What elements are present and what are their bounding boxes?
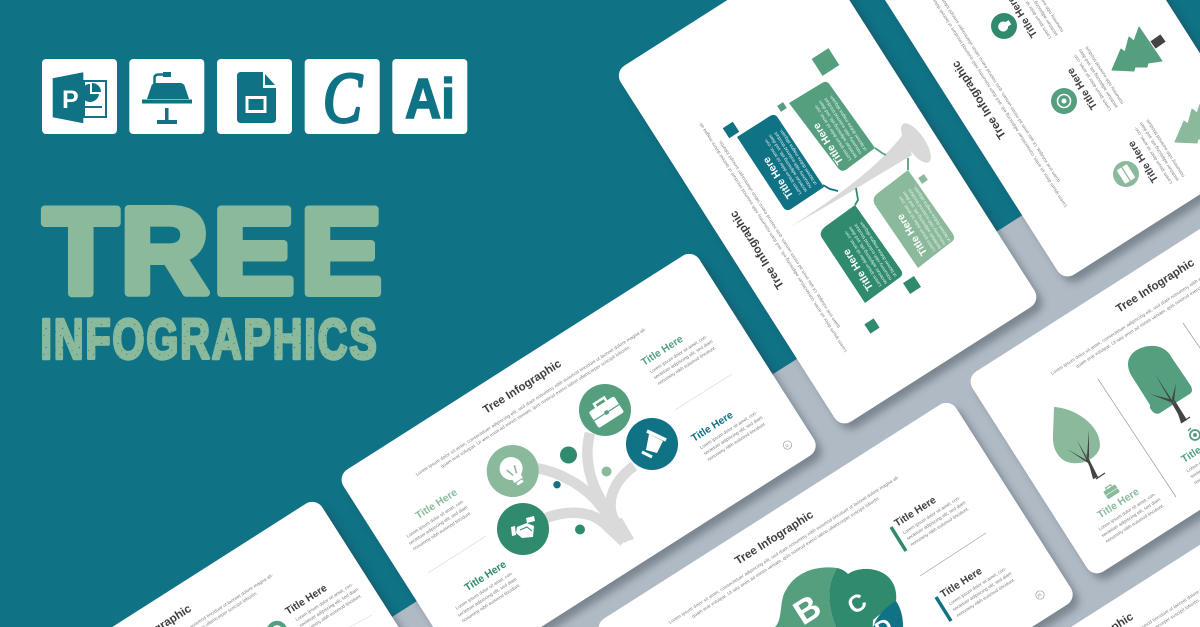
panel: slide with circle tree — [337, 249, 826, 627]
icon: pine tree green — [1112, 27, 1163, 71]
text block: left bottom: nonummy nibh euismod tincidunt. — [461, 582, 521, 623]
intro text: Lorem ipsum dolor sit amet, consectetuer adipiscing elit, sed diam nonummy nibh euismod tincidunt ut laoreet dolore magna ali- — [415, 326, 647, 477]
icon: PowerPoint: P — [62, 86, 79, 114]
page number — [783, 441, 792, 449]
text block: Title Here — [284, 583, 330, 618]
box: sage: sectetuer adipiscing elit, sed diam — [901, 190, 942, 250]
heading: INFOGRAPHICS: INFOGRAPHICS — [41, 307, 377, 371]
icon: Keynote — [129, 59, 204, 134]
background: grey band — [370, 102, 1200, 627]
icon: arch tree — [1128, 346, 1192, 423]
panel: slide with pine trees — [837, 0, 1200, 287]
heading: TREE: TREE — [44, 183, 382, 319]
text block: right bottom: nonummy nibh euismod tincidunt. — [706, 421, 767, 462]
text block: right top: sectetuer adipiscing elit, sed diam — [653, 339, 714, 380]
box: dark green: Title Here — [841, 246, 876, 292]
box: dark green: ut laoreet dolore magna aliquam. — [858, 220, 898, 278]
box: dark green: nonummy nibh euismod tincidunt — [853, 222, 893, 281]
panel: slide with letter cloud — [594, 398, 1083, 627]
text block: first: nonummy nibh euismod tincidunt. — [909, 506, 970, 547]
text block: left bottom — [445, 558, 522, 624]
text block: third: nonummy nibh euismod tincidunt. — [1144, 118, 1185, 178]
icon: Google Slides — [217, 59, 292, 134]
text block: left top — [396, 486, 473, 552]
text block: right bottom — [690, 397, 767, 463]
icon: Canva: C — [323, 58, 363, 138]
text block: second: sectetuer adipiscing elit, sed diam — [1077, 48, 1119, 109]
icon: Illustrator: Ai — [405, 67, 455, 131]
intro text: Lorem ipsum dolor sit amet, consectetuer adipiscing elit, sed diam nonummy nibh euismod tincidunt ut laoreet dolore magna ali- — [697, 121, 848, 353]
text block: left bottom: Lorem ipsum dolor sit amet, con- — [455, 570, 514, 611]
box: dark green — [821, 205, 902, 303]
text block: second: Lorem ipsum dolor sit amet, con- — [1072, 52, 1112, 112]
box: sage — [874, 170, 954, 268]
page number: 11 — [784, 443, 790, 448]
chart: tree branches — [536, 433, 634, 542]
panel: slide bottom right — [914, 500, 1200, 627]
icon: pine tree sage — [1175, 99, 1200, 143]
heading: Tree Infographic — [949, 58, 1009, 141]
icon: briefcase — [1102, 483, 1120, 499]
heading: Tree Infographic — [733, 508, 816, 568]
text block: arch tree — [1178, 420, 1200, 485]
text block: second: Title Here — [939, 566, 985, 601]
text block: left top: nonummy nibh euismod tincidunt. — [412, 510, 472, 551]
chart: letter cloud: C — [843, 588, 872, 620]
panel: slide bottom left — [0, 497, 449, 627]
text block: right bottom: Lorem ipsum dolor sit amet, con- — [699, 410, 758, 450]
intro text — [988, 576, 1200, 627]
text block: left top: Title Here — [414, 487, 460, 522]
text block: third — [1121, 117, 1186, 193]
page number: 25 — [1037, 593, 1042, 598]
box: teal: Lorem ipsum dolor sit amet, con- — [763, 137, 802, 196]
box: sage: Title Here — [895, 211, 930, 257]
box: teal: ut laoreet dolore magna aliquam. — [778, 128, 818, 186]
icon: leaf tree — [1053, 407, 1105, 479]
text block: first — [1000, 0, 1065, 48]
chart: letter cloud — [775, 567, 903, 627]
box: mid green: nonummy nibh euismod tincidunt — [823, 96, 863, 155]
box: sage: ut laoreet dolore magna aliquam. — [912, 185, 952, 243]
text block: first: Lorem ipsum dolor sit amet, con- — [902, 495, 961, 535]
text block: right top — [640, 321, 717, 387]
page number — [1036, 591, 1044, 599]
text block: first: Title Here — [893, 495, 939, 530]
icon: target — [1051, 88, 1077, 114]
chart: nail trunk — [790, 119, 936, 227]
text block: left top: Lorem ipsum dolor sit amet, con- — [406, 498, 465, 539]
box: sage: nonummy nibh euismod tincidunt — [907, 187, 947, 246]
text block: right bottom: sectetuer adipiscing elit, sed diam — [703, 415, 764, 456]
text block: second: nonummy nibh euismod tincidunt. — [1083, 45, 1124, 105]
connector tails — [823, 148, 908, 205]
text block — [284, 569, 363, 627]
box: dark green: sectetuer adipiscing elit, sed diam — [847, 225, 888, 285]
text block: leaf tree: nonummy nibh euismod tincidunt. — [1104, 503, 1165, 544]
text block: leaf tree: sectetuer adipiscing elit, sed diam — [1100, 497, 1161, 538]
node: handshake — [497, 503, 549, 555]
text block: right top: Lorem ipsum dolor sit amet, con- — [649, 334, 708, 374]
text block: second — [1060, 44, 1125, 120]
icon row: software logos — [42, 58, 467, 138]
intro text — [1050, 225, 1200, 376]
text block: leaf tree: Lorem ipsum dolor sit amet, con- — [1098, 491, 1157, 532]
text block: leaf tree — [1089, 479, 1165, 544]
text block: third: Lorem ipsum dolor sit amet, con- — [1133, 125, 1173, 185]
icon: Canva — [305, 58, 380, 138]
text block: third: sectetuer adipiscing elit, sed diam — [1138, 121, 1180, 182]
icon: stacked case — [1113, 161, 1139, 187]
icon: location ring — [269, 623, 285, 627]
heading: Tree Infographic — [1114, 256, 1197, 316]
dots — [553, 446, 612, 534]
text block: left bottom: sectetuer adipiscing elit, sed diam — [457, 576, 518, 618]
text block: leaf tree: Title Here — [1096, 486, 1142, 521]
box: mid green: sectetuer adipiscing elit, sed diam — [817, 99, 858, 159]
text block: right bottom: Title Here — [690, 410, 736, 445]
box: teal — [737, 115, 824, 210]
box: mid green: Title Here — [811, 120, 846, 166]
icon: stopwatch — [1188, 428, 1200, 440]
box: mid green: ut laoreet dolore magna aliquam. — [828, 94, 868, 152]
node: megaphone — [626, 418, 678, 470]
text block: first — [891, 482, 970, 551]
box: sage: Lorem ipsum dolor sit amet, con- — [897, 194, 936, 253]
text block: second: Title Here — [1065, 65, 1100, 111]
intro text: Lorem ipsum dolor sit amet, consectetuer adipiscing elit, sed diam nonummy nibh euismod tincidunt ut laoreet dolore magna ali- — [668, 474, 900, 625]
text block: second: Lorem ipsum dolor sit amet, con- — [948, 566, 1007, 606]
text block: second — [936, 553, 1016, 621]
intro text: quam erat volutpat. Ut wisi enim ad minim veniam, quis nostrud exerci tation ullamcorper suscipit lobortis. — [691, 495, 881, 619]
text block: second: sectetuer adipiscing elit, sed diam — [952, 571, 1013, 612]
intro text: quam erat volutpat. Ut wisi enim ad minim veniam, quis nostrud exerci tation ullamcorper suscipit lobortis. — [440, 344, 631, 469]
panel: slide with leaf trees — [966, 151, 1200, 584]
text block: third: Title Here — [1126, 138, 1161, 184]
text block: sectetuer adipiscing elit, sed diam — [298, 587, 359, 627]
box: mid green: Lorem ipsum dolor sit amet, con- — [813, 103, 852, 162]
box: mid green — [789, 82, 875, 171]
text block: left top: sectetuer adipiscing elit, sed diam — [408, 504, 469, 546]
trunk base — [604, 518, 634, 544]
heading: Tree Infographic — [481, 357, 564, 417]
text block: second: nonummy nibh euismod tincidunt. — [955, 577, 1016, 618]
box: teal: Title Here — [761, 154, 796, 200]
icon: PowerPoint — [42, 59, 117, 134]
heading: Tree Infographic — [727, 208, 787, 291]
text block: right top: Title Here — [640, 334, 686, 369]
box: teal: sectetuer adipiscing elit, sed diam — [767, 133, 808, 193]
node: bulb — [487, 445, 539, 497]
text block: Lorem ipsum dolor sit amet, con- — [295, 582, 354, 622]
intro text — [42, 572, 274, 627]
decorative squares — [723, 48, 928, 334]
text block: left bottom: Title Here — [463, 559, 509, 594]
box: dark green: Lorem ipsum dolor sit amet, con- — [843, 229, 882, 288]
text block: right top: nonummy nibh euismod tincidunt. — [656, 345, 717, 386]
icon: bulb — [991, 13, 1017, 39]
node: briefcase — [579, 384, 631, 436]
icon: Illustrator — [392, 59, 467, 134]
text block: first: sectetuer adipiscing elit, sed diam — [906, 500, 967, 541]
panel: slide with speech boxes and nail tree — [614, 0, 1047, 434]
box: teal: nonummy nibh euismod tincidunt — [773, 130, 813, 189]
intro text: quam erat volutpat. Ut wisi enim ad minim veniam, quis nostrud exerci tation ullamcorper suscipit lobortis. — [717, 139, 841, 329]
